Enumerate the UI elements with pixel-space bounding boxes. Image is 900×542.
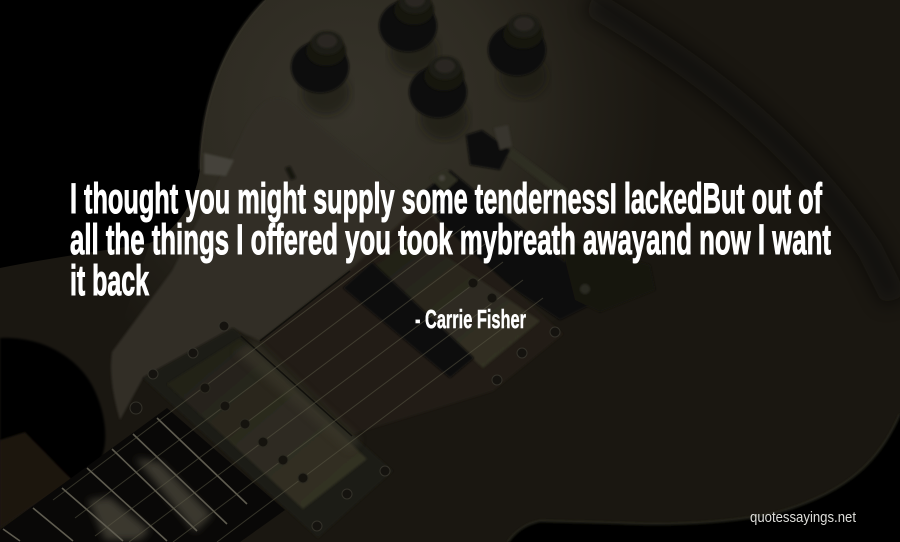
neck pickup cover (167, 338, 367, 509)
author attribution: - Carrie Fisher (415, 304, 526, 334)
knobs (291, 0, 547, 140)
frets (3, 418, 247, 541)
pickup edge line (241, 271, 352, 436)
dark band across pickup (343, 262, 474, 378)
lower rim highlight (508, 414, 900, 542)
bridge pickup ring (260, 205, 563, 434)
pickguard clip tab (204, 153, 234, 176)
mounting screws (130, 321, 560, 531)
pickup pole pieces (200, 278, 497, 483)
lower left body patch (0, 432, 72, 528)
pickup highlight streak (235, 342, 360, 452)
bridge pickup cover (372, 235, 540, 368)
cutaway black shape (0, 338, 105, 480)
pickguard screw (285, 166, 296, 180)
pickguard (111, 98, 440, 420)
quote text (70, 175, 831, 305)
watermark: quotessayings.net (750, 509, 857, 526)
body rim upper left (200, 0, 265, 170)
quote line 3: it back (70, 257, 149, 305)
curved plate edge shadow (590, 2, 895, 300)
strings (53, 208, 543, 542)
bridge block (420, 125, 655, 320)
top plate with soft light (110, 0, 860, 400)
fretboard (0, 408, 285, 542)
fret inlay markers (88, 458, 212, 540)
neck pickup ring (143, 328, 393, 538)
